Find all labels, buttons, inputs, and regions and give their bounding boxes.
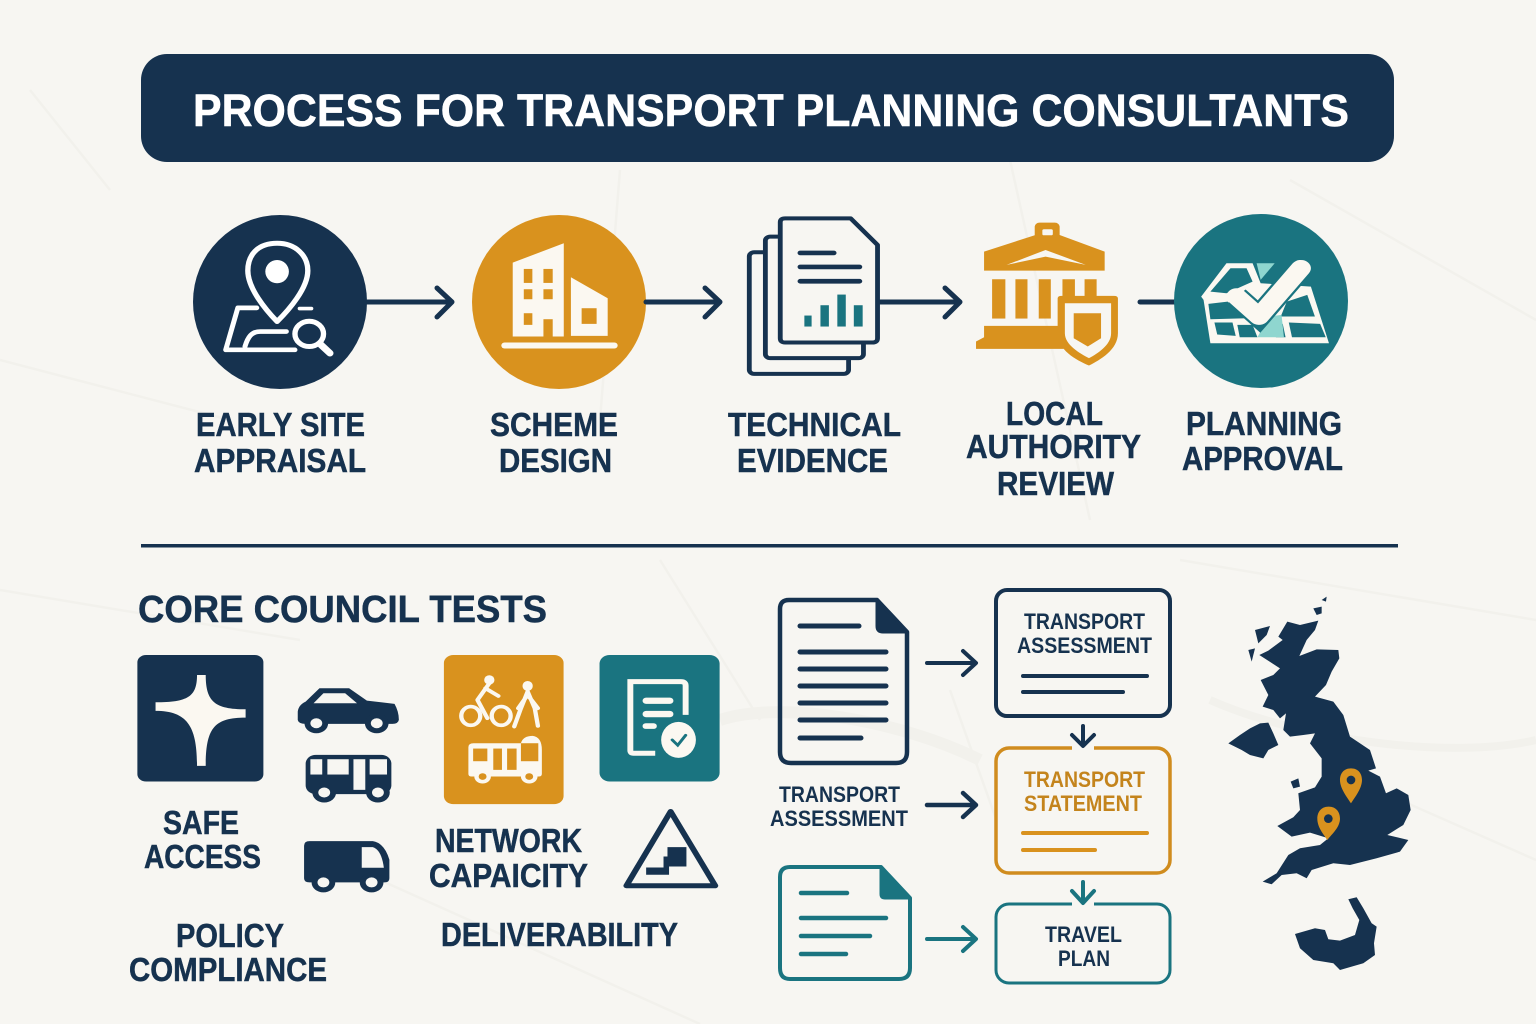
label: early site appraisal: EARLY SITE bbox=[196, 406, 365, 443]
process step 5: planning approval bbox=[1174, 214, 1348, 477]
label: safe access: SAFE bbox=[163, 804, 239, 841]
arrow: step 4 to 5 bbox=[1140, 300, 1180, 304]
box: transport assessment bbox=[996, 590, 1170, 716]
label: transport assessment bbox=[770, 782, 909, 831]
icon: buildings bbox=[472, 215, 646, 389]
icon: location pin south bbox=[1317, 807, 1340, 840]
icon: van bbox=[304, 841, 389, 892]
icon: warning triangle bbox=[626, 811, 715, 886]
box: travel plan bbox=[996, 904, 1170, 983]
label: early site appraisal bbox=[194, 406, 366, 479]
arrow: label to transport statement bbox=[927, 793, 976, 817]
label: scheme design: DESIGN bbox=[499, 442, 612, 479]
box: transport statement bbox=[996, 748, 1170, 873]
heading: core council tests: CORE COUNCIL TESTS bbox=[138, 589, 547, 631]
arrow: assessment to statement bbox=[1072, 726, 1094, 751]
title banner bbox=[141, 54, 1394, 162]
label: transport assessment: ASSESSMENT bbox=[770, 806, 909, 831]
map: UK with location pins bbox=[1228, 597, 1411, 970]
box: travel plan: PLAN bbox=[1058, 946, 1110, 971]
label: deliverability: DELIVERABILITY bbox=[441, 916, 678, 953]
icon: map pin with magnifier bbox=[193, 215, 367, 389]
arrow: statement to travel plan bbox=[1072, 882, 1094, 908]
label: policy compliance: COMPLIANCE bbox=[129, 951, 327, 988]
label: local authority review: REVIEW bbox=[997, 465, 1115, 502]
icon: civic building with shield bbox=[976, 223, 1118, 366]
box: transport statement: STATEMENT bbox=[1024, 791, 1142, 816]
box: travel plan: TRAVEL bbox=[1045, 922, 1122, 947]
label: local authority review bbox=[966, 395, 1141, 502]
icon: transport assessment document bbox=[780, 600, 907, 763]
icon: stacked documents with chart bbox=[749, 218, 878, 374]
box: transport statement: TRANSPORT bbox=[1024, 767, 1145, 792]
label: network capacity: CAPAICITY bbox=[429, 857, 588, 894]
label: policy compliance: POLICY bbox=[176, 917, 284, 954]
label: planning approval: APPROVAL bbox=[1182, 440, 1343, 477]
icon: location pin north bbox=[1340, 768, 1362, 803]
label: technical evidence bbox=[728, 406, 901, 479]
icon: travel plan document bbox=[780, 867, 910, 979]
label: network capacity bbox=[429, 822, 588, 894]
process step 4: local authority review bbox=[966, 223, 1141, 502]
label: transport assessment: TRANSPORT bbox=[779, 782, 900, 807]
label: planning approval bbox=[1182, 405, 1343, 477]
arrow: document to travel plan bbox=[927, 927, 976, 951]
box: transport assessment: TRANSPORT bbox=[1024, 609, 1145, 634]
icon: map with check mark bbox=[1174, 214, 1348, 388]
title: PROCESS FOR TRANSPORT PLANNING CONSULTANTS bbox=[193, 85, 1349, 136]
arrow: step 1 to 2 bbox=[367, 288, 452, 317]
icon: cycle, pedestrian and bus tile bbox=[444, 655, 564, 804]
icon: junction tile bbox=[137, 655, 263, 782]
label: planning approval: PLANNING bbox=[1186, 405, 1342, 442]
icon: car bbox=[298, 688, 399, 733]
process step 3: technical evidence bbox=[728, 218, 901, 479]
label: network capacity: NETWORK bbox=[435, 822, 582, 859]
icon: bus bbox=[306, 755, 391, 803]
icon: compliance document tile bbox=[600, 655, 720, 782]
label: safe access: ACCESS bbox=[144, 838, 261, 875]
label: technical evidence: EVIDENCE bbox=[737, 442, 888, 479]
panel: safe access bbox=[137, 655, 263, 875]
arrow: document to transport assessment bbox=[927, 651, 976, 675]
box: transport assessment: ASSESSMENT bbox=[1017, 633, 1152, 658]
process step 2: scheme design bbox=[472, 215, 646, 479]
process step 1: early site appraisal bbox=[193, 215, 367, 479]
label: policy compliance bbox=[129, 917, 327, 988]
arrow: step 3 to 4 bbox=[880, 288, 960, 317]
label: scheme design: SCHEME bbox=[490, 406, 618, 443]
label: technical evidence: TECHNICAL bbox=[728, 406, 901, 443]
label: scheme design bbox=[490, 406, 618, 479]
label: early site appraisal: APPRAISAL bbox=[194, 442, 366, 479]
label: local authority review: AUTHORITY bbox=[966, 428, 1141, 465]
arrow: step 2 to 3 bbox=[646, 288, 720, 317]
label: local authority review: LOCAL bbox=[1006, 395, 1103, 432]
panel: network capacity bbox=[429, 655, 588, 894]
label: safe access bbox=[144, 804, 261, 875]
